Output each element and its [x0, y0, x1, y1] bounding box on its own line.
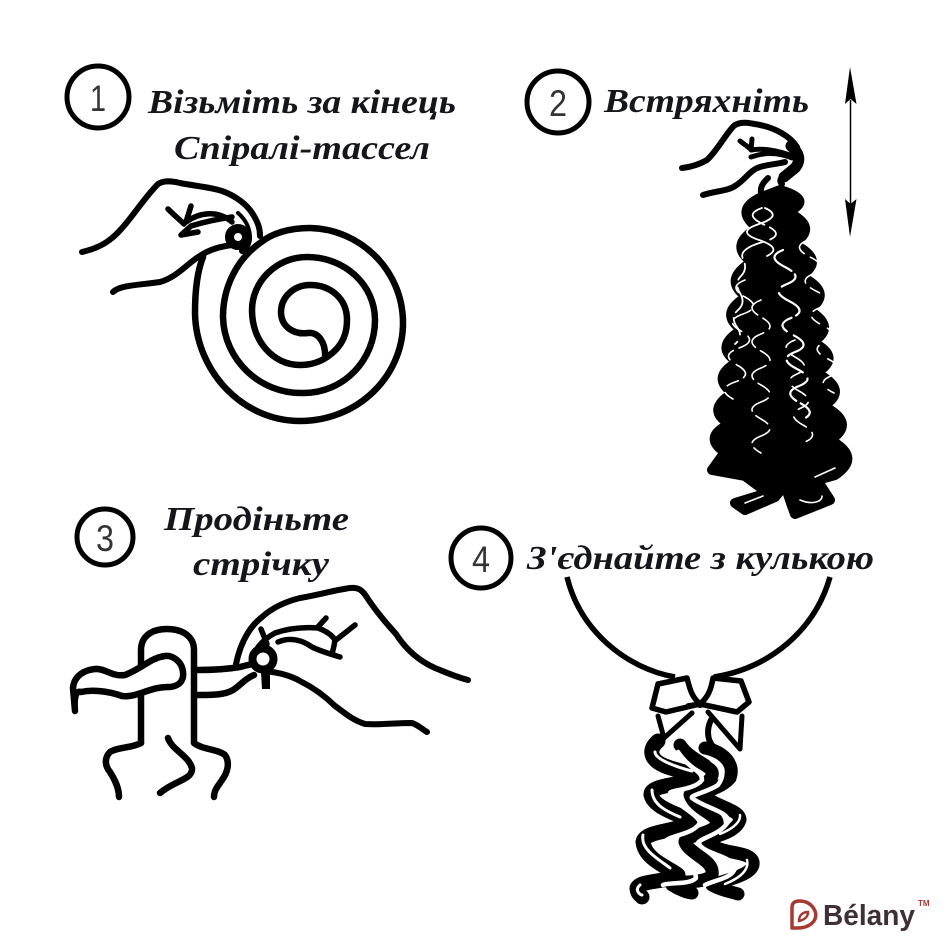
- illustration: hand holding coiled spiral: [82, 181, 403, 421]
- step 3 heading: [163, 501, 349, 583]
- brand logo: [792, 899, 930, 932]
- logo heart icon: [792, 901, 816, 928]
- hand: [82, 181, 260, 252]
- hand: [236, 588, 468, 680]
- step 2 number badge: 2: [549, 83, 567, 124]
- step 4 number badge: 4: [472, 539, 490, 580]
- step 3 number badge: [77, 509, 133, 565]
- curled strands: [637, 741, 692, 897]
- logo wordmark: Bélany: [823, 900, 915, 932]
- bow: [652, 678, 700, 712]
- step 1 heading: [147, 84, 456, 167]
- right ribbon: [198, 664, 254, 695]
- hand: [682, 123, 797, 168]
- step 4 heading: З'єднайте з кулькою: [526, 540, 874, 577]
- loop feet and tassel strands: [106, 743, 141, 797]
- logo leaf: [799, 912, 808, 921]
- step 2 heading: Встряхніть: [603, 83, 809, 120]
- step 1 number badge: 1: [90, 78, 106, 119]
- illustration: tassel tied to balloon: [567, 577, 830, 897]
- illustration: threading ribbon through loop: [73, 588, 468, 797]
- left ribbon: [73, 656, 183, 711]
- spiral coil: [195, 228, 403, 421]
- loop post: [141, 629, 194, 743]
- step 1 heading: Спіралі-тассел: [174, 130, 430, 167]
- trademark: TM: [918, 899, 930, 908]
- double-headed shake arrow: [845, 67, 856, 237]
- illustration: hand shaking tassel: [682, 123, 847, 514]
- step 2 number badge: [527, 71, 589, 133]
- tassel highlights: [734, 208, 776, 344]
- balloon edge: [567, 577, 830, 677]
- tassel body: [712, 190, 847, 514]
- step 3 number badge: 3: [96, 518, 114, 559]
- step 1 number badge: [67, 66, 129, 128]
- step 1 heading: Візьміть за кінець: [147, 84, 456, 121]
- step 3 heading: Продіньте: [163, 501, 349, 538]
- step 3 heading: стрічку: [193, 546, 330, 583]
- step 4 number badge: [451, 528, 511, 588]
